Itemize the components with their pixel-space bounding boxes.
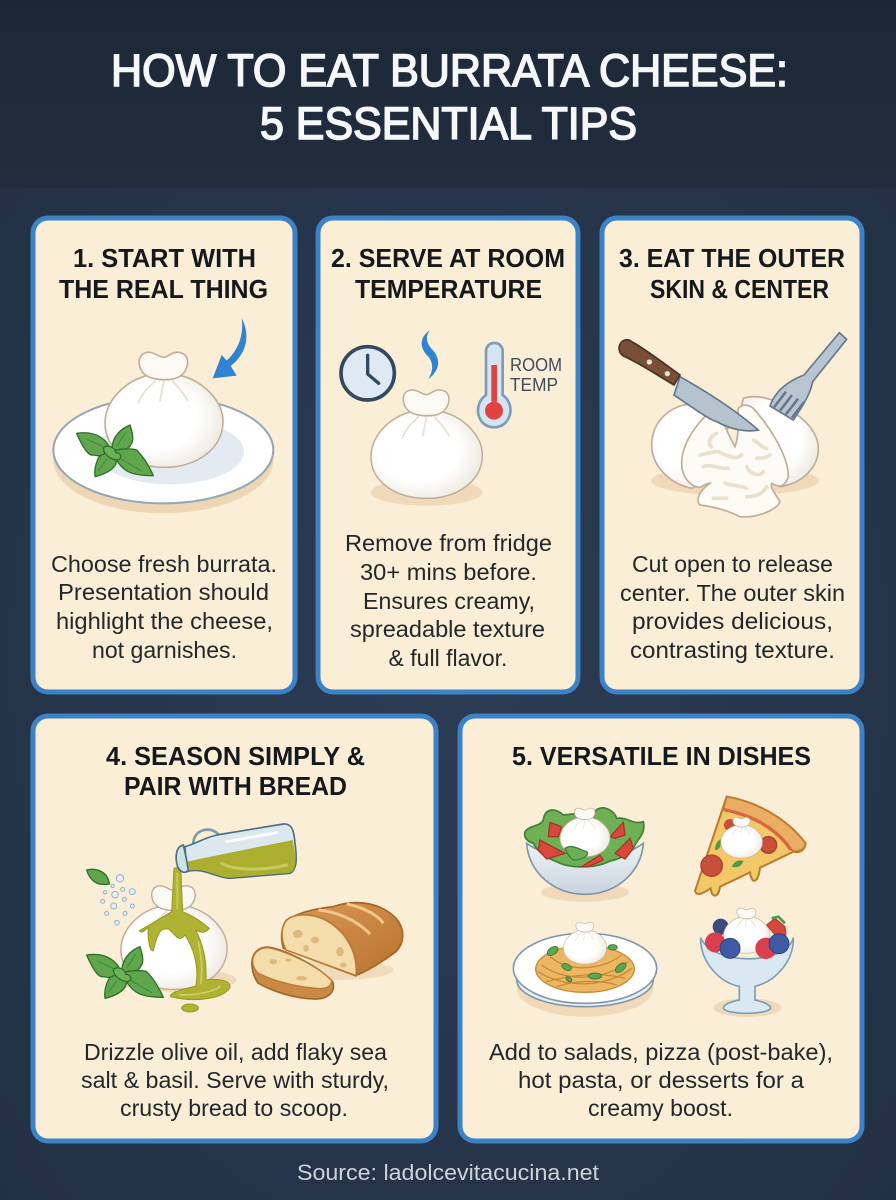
title: 5 ESSENTIAL TIPS xyxy=(260,98,637,149)
label: room temp: TEMP xyxy=(510,375,558,395)
text: tip 2 body: & full flavor. xyxy=(389,645,507,671)
heading: tip 3: 3. EAT THE OUTER xyxy=(619,243,845,273)
icon: pizza slice xyxy=(695,797,806,896)
illustration: four burrata dishes xyxy=(513,797,806,1017)
text: tip 4 body xyxy=(81,1039,389,1121)
heading: tip 1: THE REAL THING xyxy=(59,274,268,304)
text: tip 4 body: salt & basil. Serve with sturdy, xyxy=(81,1067,389,1093)
heading: tip 2: TEMPERATURE xyxy=(355,274,542,304)
text: tip 2 body: Remove from fridge xyxy=(345,530,552,556)
text: tip 1 body: highlight the cheese, xyxy=(56,608,273,634)
text: tip 4 body: Drizzle olive oil, add flaky sea xyxy=(84,1039,387,1065)
panel: tip 3 eat the outer skin and center xyxy=(602,218,862,692)
text: tip 2 body xyxy=(345,530,552,671)
heading: tip 3: SKIN & CENTER xyxy=(650,274,829,304)
icon: dessert glass xyxy=(701,908,793,1017)
heading: tip 2 xyxy=(331,243,565,304)
text: tip 2 body: 30+ mins before. xyxy=(360,559,537,585)
text: tip 1 body xyxy=(51,551,277,663)
text: tip 1 body: Presentation should xyxy=(58,579,269,605)
icon: salad bowl xyxy=(525,808,644,902)
text: tip 1 body: not garnishes. xyxy=(92,637,237,663)
text: tip 2 body: spreadable texture xyxy=(350,616,545,642)
text: tip 5 body xyxy=(489,1039,833,1121)
heading: tip 5: 5. VERSATILE IN DISHES xyxy=(512,741,811,771)
text: tip 3 body: contrasting texture. xyxy=(630,637,835,663)
text: tip 3 body: center. The outer skin xyxy=(620,580,845,606)
illustration: burrata with olive oil, salt, basil and bread xyxy=(87,824,403,1012)
text: tip 2 body: Ensures creamy, xyxy=(363,588,535,614)
text: tip 3 body: Cut open to release xyxy=(632,551,833,577)
heading: tip 4: 4. SEASON SIMPLY & xyxy=(106,741,365,771)
heading: tip 1 xyxy=(59,243,268,304)
panel: tip 2 serve at room temperature xyxy=(318,218,578,692)
text: tip 4 body: crusty bread to scoop. xyxy=(120,1095,348,1121)
text: tip 3 body: provides delicious, xyxy=(632,608,833,634)
panel: tip 5 versatile in dishes xyxy=(460,716,862,1141)
heading: tip 4: PAIR WITH BREAD xyxy=(124,771,347,801)
title: HOW TO EAT BURRATA CHEESE: xyxy=(111,45,788,96)
text: tip 5 body: hot pasta, or desserts for a xyxy=(518,1067,804,1093)
text: tip 1 body: Choose fresh burrata. xyxy=(51,551,277,577)
text: tip 3 body xyxy=(620,551,845,663)
text: tip 5 body: creamy boost. xyxy=(588,1095,733,1121)
heading: tip 2: 2. SERVE AT ROOM xyxy=(331,243,565,273)
label: room temp: ROOM xyxy=(510,355,562,375)
illustration: burrata with clock, steam and thermometer xyxy=(341,330,510,506)
title xyxy=(111,45,788,149)
source line: Source: ladolcevitacucina.net xyxy=(297,1160,599,1185)
heading: tip 1: 1. START WITH xyxy=(73,243,256,273)
illustration: burrata on plate with basil and arrow xyxy=(53,318,273,513)
heading: tip 4 xyxy=(106,741,365,801)
text: tip 5 body: Add to salads, pizza (post-bake), xyxy=(489,1039,833,1065)
heading: tip 3 xyxy=(619,243,845,304)
icon: pasta plate xyxy=(513,922,657,1017)
illustration: cut burrata with knife and fork xyxy=(619,333,847,517)
panel: tip 4 season simply and pair with bread xyxy=(33,716,436,1141)
header band xyxy=(0,0,896,188)
panel: tip 1 start with the real thing xyxy=(33,218,295,692)
label: room temp xyxy=(510,355,562,395)
